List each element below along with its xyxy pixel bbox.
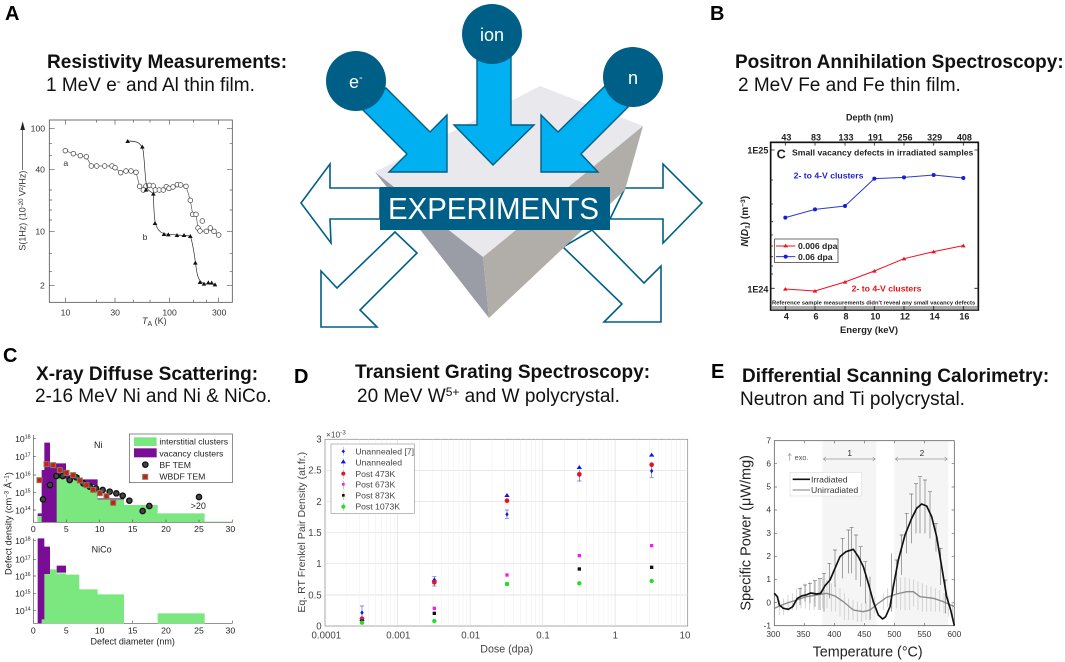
chart: defect density histograms: 20 [161,625,171,635]
chart: positron annihilation: 4 [784,311,789,321]
chart: positron annihilation: 133 [838,133,853,143]
arrow: ion [454,57,534,165]
panel label D: D [294,366,308,388]
chart: positron annihilation: −3 [740,199,747,207]
chart: positron annihilation: 0.06 dpa [798,252,833,262]
error bars [360,467,654,619]
cube [375,86,643,318]
particle: e- [326,51,386,111]
particle: n: n [628,68,638,88]
chart: specific power vs temperature: 7 [766,435,771,445]
series markers [359,453,654,625]
annotations: 1 [847,448,852,458]
annotations: 2 [920,448,925,458]
chart: defect density histograms: 30 [226,524,235,534]
chart: defect density histograms: 0 [31,625,36,635]
chart: positron annihilation: 2- to 4-V clusters [794,170,864,180]
chart: defect density histograms: 10 [15,471,25,481]
heading: transient grating: 5+ [446,385,459,399]
chart: positron annihilation: 12 [900,311,910,321]
chart: specific power vs temperature: Specific Power (μW/mg) [739,455,755,611]
chart: specific power vs temperature: Temperature (°C) [813,645,923,661]
chart: defect density histograms: 5 [64,625,69,635]
chart: defect density histograms: Å [4,481,14,491]
chart: defect density histograms: 30 [226,625,235,635]
chart: defect density histograms: 10 [15,571,25,581]
particle: e-: - [359,72,363,84]
chart: resistivity noise vs temperature: -20 [19,198,25,207]
chart: positron annihilation: 43 [781,133,791,143]
particle: ion: ion [480,25,504,45]
chart: resistivity noise vs temperature: a [63,158,68,168]
chart: Frenkel pair density vs dose: 10 [680,631,690,642]
legend: WBDF TEM [159,472,205,482]
chart: positron annihilation: 0.006 dpa [798,241,838,251]
chart: Frenkel pair density vs dose: 0.0001 [312,631,341,642]
chart: positron annihilation: 2- to 4-V clusters [852,284,922,294]
panel label B: B [710,3,724,25]
chart: specific power vs temperature: 2 [766,551,771,561]
chart: specific power vs temperature: 350 [796,629,811,639]
chart: specific power vs temperature: 600 [947,629,962,639]
chart: specific power vs temperature: 450 [857,629,872,639]
heading: resistivity: - [117,74,121,88]
heading: x-ray: 2-16 MeV Ni and Ni & NiCo. [35,386,272,407]
chart: specific power vs temperature: 3 [766,528,771,538]
chart: defect density histograms: 20 [161,524,171,534]
irradiated curve [774,504,954,626]
legend: interstitial clusters [159,437,229,447]
chart: positron annihilation: 1E24 [747,285,768,295]
heading: transient grating [355,362,650,407]
legend: Post 1073K [355,502,400,512]
legend [331,444,414,513]
axis label: TA (K): A [148,321,152,328]
panel label C: C [3,345,17,367]
chart: positron annihilation: ) (m [740,207,751,225]
chart: defect density histograms: 10 [95,625,105,635]
chart: defect density histograms: −3 [5,490,11,498]
arrow: electron [363,88,447,172]
chart: resistivity noise vs temperature: b [143,232,148,242]
chart: Frenkel pair density vs dose: 0.5 [308,590,322,601]
heading: transient grating: 20 MeV W [357,386,446,407]
chart: resistivity noise vs temperature: 30 [110,307,120,317]
legend: vacancy clusters [159,449,224,459]
axis label: TA (K): T [142,316,149,326]
annotations: exo. [795,453,809,462]
heading: calorimetry: Differential Scanning Calorimetry: [742,366,1049,387]
chart: defect density histograms: 18 [25,435,31,441]
irradiated error bars [800,477,945,620]
top histogram: Ni: >20 [191,501,206,511]
chart: Frenkel pair density vs dose: ×10 [326,429,340,439]
chart: positron annihilation: 14 [930,311,940,321]
chart: specific power vs temperature: 550 [917,629,932,639]
chart: defect density histograms: 15 [128,524,138,534]
chart: defect density histograms: 25 [194,524,204,534]
chart: Frenkel pair density vs dose: 2 [316,497,322,508]
chart: defect density histograms: 15 [25,489,31,495]
chart: Frenkel pair density vs dose: 0.1 [536,631,550,642]
axis label: TA (K): (K) [152,316,167,326]
chart: positron annihilation: Small vacancy defects in irradiated samples [792,147,974,157]
chart: defect density histograms: 14 [25,506,31,512]
legend: BF TEM [159,460,191,470]
heading: resistivity: Resistivity Measurements: [47,52,287,73]
chart: Frenkel pair density vs dose: 0.001 [386,631,410,642]
top histogram: Ni: Ni [94,440,102,450]
chart: defect density histograms: 15 [128,625,138,635]
chart: specific power vs temperature: 5 [766,482,771,492]
heading: positron: Positron Annihilation Spectroscopy: [735,52,1064,73]
bottom histogram: NiCo [38,538,205,623]
chart: positron annihilation: 1 [745,225,752,229]
chart: defect density histograms: 17 [25,453,31,459]
chart: defect density histograms: 10 [15,488,25,498]
chart: Frenkel pair density vs dose: 3 [316,435,322,446]
heading: resistivity [46,52,287,96]
chart: Frenkel pair density vs dose: 1.5 [308,528,322,539]
legend: Unannealed [7] [355,446,414,456]
chart: defect density histograms: 5 [64,524,69,534]
chart: Frenkel pair density vs dose: 1 [316,559,322,570]
chart: resistivity noise vs temperature: 10 [61,307,70,317]
chart: defect density histograms: 10 [15,536,25,546]
chart: defect density histograms: 17 [25,555,31,561]
bottom histogram: NiCo: NiCo [92,544,112,554]
chart: specific power vs temperature: 0 [766,597,771,607]
heading: transient grating: and W polycrystal. [459,386,620,407]
chart: positron annihilation: 6 [813,311,818,321]
chart: specific power vs temperature: 6 [766,458,771,468]
heading: calorimetry [740,366,1049,410]
chart: positron annihilation: C [777,147,786,161]
chart: positron annihilation: 329 [927,133,942,143]
chart: Frenkel pair density vs dose: 1 [613,631,618,642]
chart: positron annihilation: 16 [959,311,969,321]
chart: resistivity noise vs temperature: 100 [31,123,45,133]
chart: positron annihilation: N(D [740,229,751,247]
chart: defect density histograms: 14 [25,607,31,613]
chart: positron annihilation: 408 [957,133,972,143]
heading: transient grating: Transient Grating Spectroscopy: [355,362,650,383]
legend: Post 473K [355,469,396,479]
chart: defect density histograms: 15 [25,589,31,595]
panel label E: E [711,361,724,383]
chart: positron annihilation: 83 [811,133,821,143]
chart: defect density histograms: 10 [15,606,25,616]
legend: Unirradiated [811,485,858,495]
chart: defect density histograms: 16 [25,572,31,578]
chart: Frenkel pair density vs dose: 2.5 [308,466,322,477]
chart: specific power vs temperature: 400 [827,629,842,639]
chart: specific power vs temperature: 4 [766,505,771,515]
chart: defect density histograms [4,434,235,646]
chart: defect density histograms: 0 [31,524,36,534]
legend: Post 673K [355,480,396,490]
arrow: neutron [541,86,628,172]
legend: Post 873K [355,491,396,501]
chart: defect density histograms: Defect diameter (nm) [90,636,175,646]
legend [790,472,862,496]
particle: n [603,47,663,107]
heading: x-ray: X-ray Diffuse Scattering: [36,364,258,385]
chart: positron annihilation: 10 [870,311,880,321]
chart: defect density histograms: 10 [15,434,25,444]
chart: resistivity noise vs temperature: 40 [35,164,45,174]
chart: positron annihilation: 1E25 [747,145,768,155]
chart: Frenkel pair density vs dose: Eq. RT Frenkel Pair Density (at.fr.) [296,452,308,613]
chart: defect density histograms: −1 [5,475,11,482]
chart: defect density histograms: 16 [25,471,31,477]
label: experiments: EXPERIMENTS [388,191,599,226]
chart: Frenkel pair density vs dose: -3 [340,429,346,436]
chart: defect density histograms: 10 [15,589,25,599]
legend: Unannealed [355,458,402,468]
chart: specific power vs temperature: 1 [766,574,771,584]
chart: resistivity noise vs temperature: 300 [212,307,227,317]
chart: resistivity noise vs temperature: 2 [40,280,45,290]
legend: Irradiated [811,474,848,484]
axis label: energy: Energy (keV) [840,325,898,336]
unirradiated error bars [779,577,953,622]
heading: positron: 2 MeV Fe and Fe thin film. [738,75,961,96]
chart: defect density histograms: 10 [15,555,25,565]
chart: specific power vs temperature: 500 [887,629,902,639]
top histogram: Ni [33,434,232,623]
central diagram: experiments [301,4,702,327]
chart: resistivity noise vs temperature: 10 [35,226,45,236]
chart: resistivity noise vs temperature: S(1Hz) (10 [18,207,28,251]
chart: positron annihilation: Depth (nm) [846,113,893,123]
chart: defect density histograms: 10 [15,505,25,515]
chart: specific power vs temperature: -1 [764,620,771,630]
chart: positron annihilation: 256 [897,133,912,143]
white outgoing arrows [301,164,702,327]
chart: resistivity noise vs temperature: V²/Hz) [18,171,28,199]
chart: defect density histograms: ) [4,472,14,475]
chart: positron annihilation: ) [740,196,751,199]
chart: positron annihilation: 8 [843,311,848,321]
chart: specific power vs temperature [739,435,962,661]
chart: Frenkel pair density vs dose: 0.01 [461,631,480,642]
particle: ion [462,4,522,64]
panel label A: A [5,3,19,25]
chart: resistivity noise vs temperature [18,120,232,317]
chart: positron annihilation: Reference sample measurements didn't reveal any small vacancy defects [772,301,975,307]
chart: Frenkel pair density vs dose: Dose (dpa) [480,643,533,655]
particle: e-: e [349,72,359,92]
chart: specific power vs temperature: 300 [766,629,781,639]
chart: positron annihilation [740,113,978,321]
heading: resistivity: 1 MeV e [46,75,117,96]
heading: positron [735,52,1064,96]
chart: Frenkel pair density vs dose [296,429,690,655]
legend [129,434,232,483]
heading: resistivity: and Al thin film. [121,75,255,96]
annotations [788,448,947,462]
chart: positron annihilation: 191 [868,133,883,143]
unirradiated curve [774,592,954,612]
heading: calorimetry: Neutron and Ti polycrystal. [740,389,965,410]
chart: defect density histograms: 18 [25,537,31,543]
chart: defect density histograms: 10 [95,524,105,534]
chart: resistivity noise vs temperature: 100 [162,307,177,317]
chart: Frenkel pair density vs dose: 0 [316,621,322,632]
chart: defect density histograms: 25 [194,625,204,635]
heading: x-ray [35,364,272,407]
chart: defect density histograms: Defect density (cm [4,498,14,575]
chart: defect density histograms: 10 [15,452,25,462]
